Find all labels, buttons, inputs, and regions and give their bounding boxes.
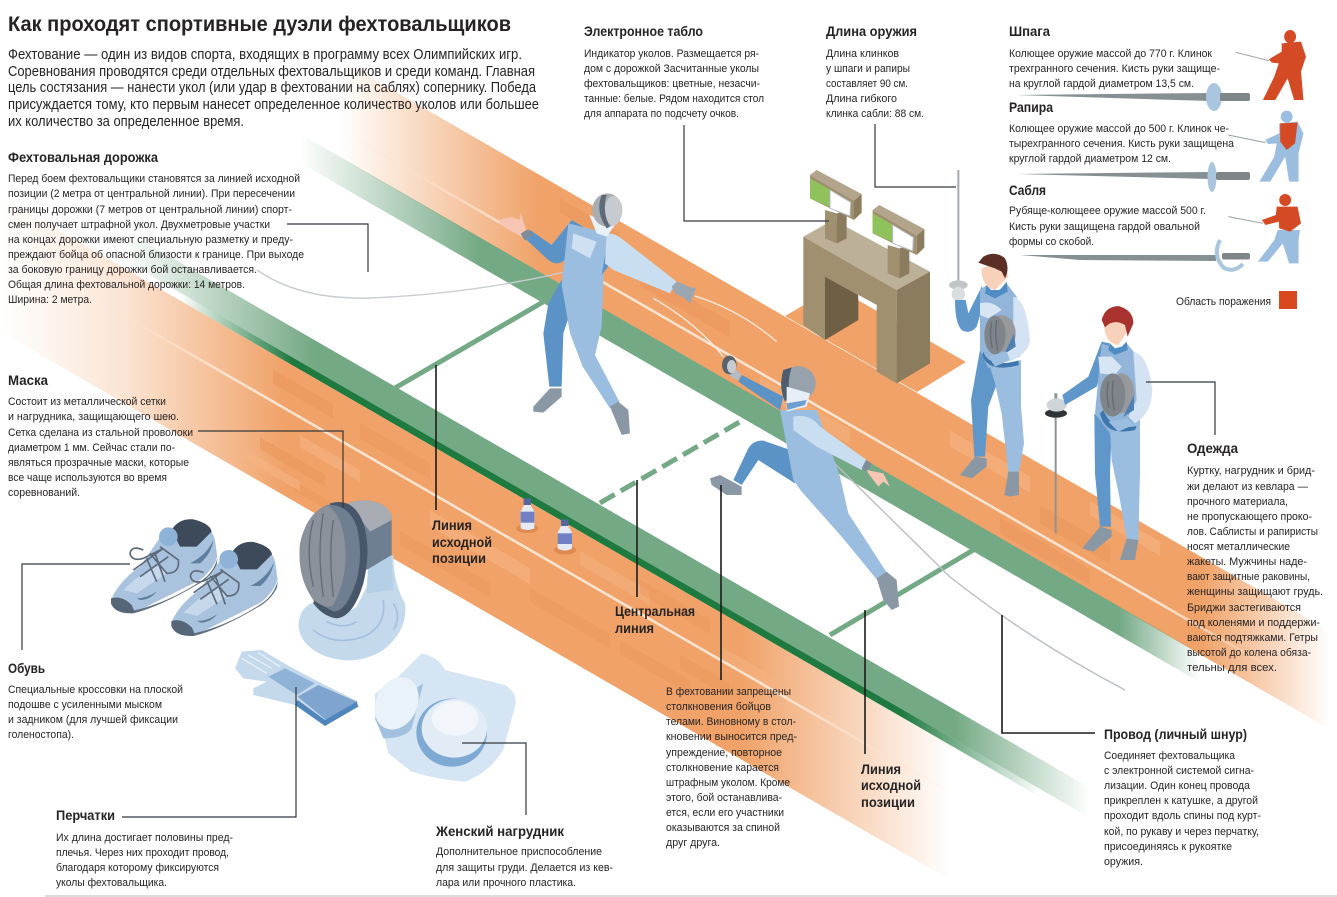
equipment: mask bbox=[298, 500, 405, 660]
intro text bbox=[8, 46, 539, 130]
label: start line right bbox=[861, 761, 921, 810]
center dashed line bbox=[600, 420, 743, 503]
text block: shoes: Обувь bbox=[8, 660, 45, 676]
text block: scoreboard: фехтовальщиков: цветные, незасчи- bbox=[584, 78, 760, 90]
leader line: scoreboard bbox=[684, 125, 829, 221]
fencer right bbox=[653, 298, 899, 610]
text block: fencing piste bbox=[8, 149, 304, 306]
display one bbox=[810, 170, 862, 243]
text block: clothing bbox=[1187, 440, 1323, 674]
text block: gloves: благодаря которому фиксируются bbox=[56, 862, 219, 874]
text block: fencing piste: Ширина: 2 метра. bbox=[8, 294, 92, 306]
label: center line: линия bbox=[615, 620, 654, 636]
upper orange strip bbox=[340, 60, 1330, 729]
text block: chest protector: лара или прочного пластика. bbox=[436, 877, 576, 889]
text block: foil: круглой гардой диаметром 12 см. bbox=[1009, 153, 1171, 165]
text block: body wire: проходит вдоль спины под курт- bbox=[1104, 810, 1261, 822]
target figure: sabre bbox=[1228, 194, 1301, 263]
text block: collisions: оказываются за спиной bbox=[666, 822, 780, 834]
label: center line bbox=[615, 603, 695, 636]
text block: weapon length: у шпаги и рапиры bbox=[826, 63, 910, 75]
text block: sabre: Рубяще-колющеее оружие массой 500 г. bbox=[1009, 205, 1206, 217]
text block: mask bbox=[8, 372, 193, 499]
upper green strip bbox=[300, 134, 1200, 682]
intro text: Фехтование — один из видов спорта, входящих в программу всех Олимпийских игр. bbox=[8, 46, 522, 63]
text block: fencing piste: позиции (2 метра от центральной линии). При пересечении bbox=[8, 188, 295, 200]
text block: gloves bbox=[56, 807, 233, 889]
text block: chest protector: для защиты груди. Делается из кев- bbox=[436, 862, 613, 874]
text block: fencing piste: Фехтовальная дорожка bbox=[8, 149, 158, 165]
text block: shoes: и задником (для лучшей фиксации bbox=[8, 714, 178, 726]
label: center line: Центральная bbox=[615, 603, 695, 619]
text block: chest protector: Женский нагрудник bbox=[435, 823, 565, 839]
text block: weapon length: клинка сабли: 88 см. bbox=[826, 108, 924, 120]
text block: clothing: Одежда bbox=[1187, 440, 1238, 456]
text block: weapon length: Длина клинков bbox=[826, 48, 899, 60]
legend: target area: Область поражения bbox=[1176, 296, 1271, 308]
text block: sabre bbox=[1009, 182, 1206, 248]
text block: collisions: столкновения бойцов bbox=[666, 701, 771, 713]
text block: fencing piste: преждают бойца об опасной близости к границе. При выходе bbox=[8, 249, 304, 261]
text block: body wire: с электронной системой сигна- bbox=[1104, 765, 1254, 777]
label: start line right: исходной bbox=[861, 777, 921, 793]
text block: fencing piste: на концах дорожки имеют специальную разметку и преду- bbox=[8, 234, 293, 246]
target figure: foil bbox=[1228, 111, 1303, 182]
standing fencer man bbox=[949, 170, 1030, 497]
fencer left bbox=[500, 193, 777, 435]
title: Как проходят спортивные дуэли фехтовальщиков bbox=[8, 13, 511, 36]
text block: collisions bbox=[666, 686, 797, 849]
label: start line left: исходной bbox=[432, 534, 492, 550]
text block: scoreboard: Электронное табло bbox=[584, 23, 703, 39]
text block: collisions: телами. Виновному в стол- bbox=[666, 716, 796, 728]
text block: clothing: Бриджи застегиваются bbox=[1187, 602, 1301, 614]
text block: mask: являться прозрачные маски, которые bbox=[8, 457, 189, 469]
leader line: clothing bbox=[1146, 382, 1215, 435]
text block: clothing: ваются подтяжками. Гетры bbox=[1187, 632, 1318, 644]
leader line: mask bbox=[198, 431, 343, 508]
text block: gloves: уколы фехтовальщика. bbox=[56, 877, 167, 889]
weapon: epee bbox=[1015, 83, 1250, 111]
text block: foil: Колющее оружие массой до 500 г. Клинок че- bbox=[1009, 123, 1229, 135]
text block: clothing: носят металлические bbox=[1187, 541, 1290, 553]
label: start line left: Линия bbox=[432, 517, 472, 533]
text block: weapon length: Длина оружия bbox=[826, 23, 917, 39]
text block: gloves: плечья. Через них проходит провод, bbox=[56, 847, 229, 859]
text block: chest protector bbox=[435, 823, 613, 889]
text block: mask: диаметром 1 мм. Сейчас стали по- bbox=[8, 442, 175, 454]
text block: clothing: вают защитные раковины, bbox=[1187, 571, 1310, 583]
leader line: shoes bbox=[22, 564, 130, 650]
leader line: start line right bbox=[864, 610, 866, 754]
text block: collisions: упреждение, повторное bbox=[666, 747, 782, 759]
leader line: collisions bbox=[720, 485, 722, 680]
weapon: foil bbox=[1015, 162, 1250, 192]
intro text: присуждается тому, кто первым нанесет определенное количество уколов или большее bbox=[8, 96, 539, 113]
text block: fencing piste: Общая длина фехтовальной дорожки: 14 метров. bbox=[8, 279, 245, 291]
intro text: Соревнования проводятся среди отдельных фехтовальщиков и среди команд. Главная bbox=[8, 63, 535, 80]
text block: shoes bbox=[8, 660, 183, 741]
text block: body wire: присоединяясь к рукоятке bbox=[1104, 841, 1232, 853]
leader line: chest protector bbox=[462, 743, 526, 815]
weapon: sabre bbox=[1020, 240, 1250, 270]
text block: sabre: формы со скобой. bbox=[1009, 236, 1094, 248]
text block: scoreboard: Индикатор уколов. Размещается ря- bbox=[584, 48, 759, 60]
leader line: gloves bbox=[122, 687, 296, 817]
text block: shoes: голеностопа). bbox=[8, 729, 74, 741]
leader line: body wire bbox=[1002, 615, 1095, 733]
bottles bbox=[516, 498, 576, 555]
leader line: start line left bbox=[435, 365, 437, 510]
leader line: center line bbox=[636, 480, 638, 597]
standing fencer woman bbox=[1045, 306, 1152, 560]
label: start line left bbox=[432, 517, 492, 566]
text block: fencing piste: за боковую границу дорожки бой останавливается. bbox=[8, 264, 257, 276]
label: start line left: позиции bbox=[432, 550, 486, 566]
text block: weapon length: составляет 90 см. bbox=[826, 78, 908, 90]
upper pale line bbox=[340, 129, 1300, 686]
leader line: weapon length bbox=[875, 124, 956, 187]
text block: scoreboard: для аппарата по подсчету очков. bbox=[584, 108, 739, 120]
text block: weapon length: Длина гибкого bbox=[826, 93, 897, 105]
text block: clothing: не пропускающего проко- bbox=[1187, 511, 1312, 523]
equipment: glove bbox=[235, 650, 358, 726]
text block: mask: и нагрудника, защищающего шею. bbox=[8, 411, 179, 423]
text block: body wire: оружия. bbox=[1104, 856, 1143, 868]
text block: scoreboard: дом с дорожкой Засчитанные уколы bbox=[584, 63, 759, 75]
body wire left bbox=[257, 270, 565, 298]
text block: body wire: прикреплен к катушке, а другой bbox=[1104, 795, 1258, 807]
text block: chest protector: Дополнительное приспособление bbox=[436, 846, 602, 858]
text block: body wire bbox=[1104, 726, 1261, 868]
text block: foil: Рапира bbox=[1009, 99, 1053, 115]
shoe left bbox=[111, 519, 217, 613]
text block: collisions: этого, бой останавлива- bbox=[666, 792, 782, 804]
display two bbox=[873, 205, 924, 278]
lower green strip bbox=[120, 228, 1090, 818]
text block: epee: Колющее оружие массой до 770 г. Клинок bbox=[1009, 48, 1212, 60]
text block: clothing: жи делают из кевлара — bbox=[1187, 481, 1308, 493]
start line left bbox=[395, 302, 543, 388]
leader line: piste bbox=[287, 224, 368, 272]
text block: sabre: Кисть руки защищена гардой овальной bbox=[1009, 221, 1200, 233]
text block: clothing: Куртку, нагрудник и брид- bbox=[1187, 465, 1315, 477]
text block: mask: Состоит из металлической сетки bbox=[8, 396, 166, 408]
text block: collisions: штрафным уколом. Кроме bbox=[666, 777, 790, 789]
text block: foil bbox=[1009, 99, 1235, 165]
text block: gloves: Перчатки bbox=[56, 807, 115, 823]
intro text: цель состязания — нанести укол (или удар в фехтовании на саблях) сопернику. Победа bbox=[8, 79, 537, 96]
text block: body wire: Соединяет фехтовальщика bbox=[1104, 750, 1236, 762]
text block: shoes: подошве с усиленными мыском bbox=[8, 699, 162, 711]
scoring table platform bbox=[785, 287, 966, 392]
text block: fencing piste: Перед боем фехтовальщики становятся за линией исходной bbox=[8, 173, 300, 185]
shoe right bbox=[171, 542, 278, 636]
text block: mask: Сетка сделана из стальной проволоки bbox=[8, 427, 193, 439]
text block: collisions: кновении выносится пред- bbox=[666, 731, 797, 743]
label: start line right: Линия bbox=[861, 761, 901, 777]
text block: mask: все чаще используются во время bbox=[8, 472, 167, 484]
target figure: epee bbox=[1236, 30, 1306, 100]
equipment: female chest protector bbox=[366, 653, 516, 782]
text block: sabre: Сабля bbox=[1009, 182, 1046, 198]
text block: collisions: друг друга. bbox=[666, 837, 720, 849]
text block: clothing: лов. Саблисты и рапиристы bbox=[1187, 526, 1318, 538]
label: start line right: позиции bbox=[861, 794, 915, 810]
text block: shoes: Специальные кроссовки на плоской bbox=[8, 684, 183, 696]
scoreboard bbox=[803, 170, 930, 383]
text block: epee bbox=[1009, 23, 1220, 90]
text block: weapon length bbox=[826, 23, 924, 120]
text block: collisions: В фехтовании запрещены bbox=[666, 686, 791, 698]
text block: mask: соревнований. bbox=[8, 487, 80, 499]
text block: fencing piste: смен получает штрафной укол. Двухметровые участки bbox=[8, 219, 270, 231]
text block: collisions: ется, если его участники bbox=[666, 807, 784, 819]
text block: clothing: тельны для всех. bbox=[1187, 662, 1277, 674]
text block: gloves: Их длина достигает половины пред- bbox=[56, 832, 233, 844]
text block: epee: Шпага bbox=[1009, 23, 1050, 39]
intro text: их количество за определенное время. bbox=[8, 113, 244, 130]
text block: scoreboard bbox=[584, 23, 764, 120]
text block: clothing: высотой до колена обяза- bbox=[1187, 647, 1311, 659]
text block: clothing: женщины защищают грудь. bbox=[1187, 586, 1323, 598]
equipment: shoes bbox=[111, 519, 278, 636]
text block: clothing: прочного материала, bbox=[1187, 496, 1288, 508]
text block: body wire: Провод (личный шнур) bbox=[1104, 726, 1247, 742]
text block: collisions: столкновение карается bbox=[666, 762, 779, 774]
text block: body wire: лизации. Один конец провода bbox=[1104, 780, 1251, 792]
text block: epee: трехгранного сечения. Кисть руки защище- bbox=[1009, 63, 1220, 75]
lower orange strip bbox=[0, 196, 960, 886]
lower dark green strip bbox=[180, 292, 1040, 797]
body wire right bbox=[823, 452, 1125, 690]
text block: foil: тырехгранного сечения. Кисть руки защищена bbox=[1009, 138, 1235, 150]
text block: clothing: под коленями и поддержи- bbox=[1187, 617, 1320, 629]
text block: epee: на круглой гардой диаметром 13,5 см. bbox=[1009, 78, 1194, 90]
start line right bbox=[830, 549, 975, 635]
text block: clothing: жакеты. Мужчины наде- bbox=[1187, 556, 1307, 568]
text block: mask: Маска bbox=[8, 372, 48, 388]
text block: scoreboard: танные: белые. Рядом находится стол bbox=[584, 93, 764, 105]
text block: fencing piste: границы дорожки (7 метров от центральной линии) спорт- bbox=[8, 204, 292, 216]
legend: target area bbox=[1176, 291, 1297, 309]
text block: body wire: кой, по рукаву и через перчатку, bbox=[1104, 826, 1259, 838]
